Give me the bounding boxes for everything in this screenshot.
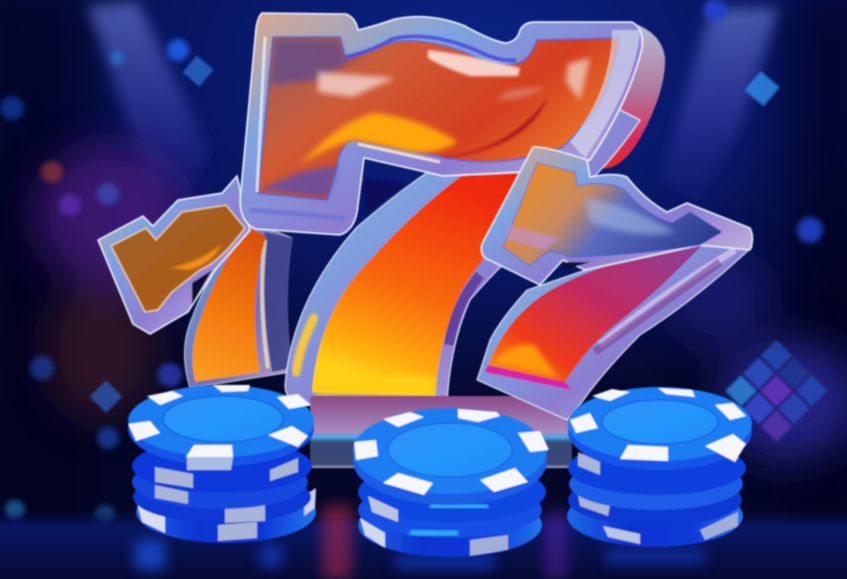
left stack lower chips [132, 439, 316, 543]
right stack lower chips [567, 441, 746, 547]
middle stack top chip [353, 408, 549, 505]
background glow [35, 145, 847, 460]
seven: left [98, 176, 293, 388]
right seven stem [477, 225, 752, 420]
left spotlight beam [88, 2, 208, 205]
right stack top chip [568, 387, 752, 470]
left seven head [98, 176, 250, 334]
seven: right [477, 147, 752, 420]
left stack top chip [128, 385, 314, 470]
right spotlight beam [660, 8, 778, 205]
glass base [310, 396, 572, 468]
big seven head [240, 13, 642, 235]
middle stack lower chips [358, 462, 546, 557]
left seven stem [184, 215, 293, 388]
chip stack: middle [353, 408, 549, 557]
big seven extrusion [570, 22, 665, 169]
chip stack: left [128, 385, 316, 543]
chip reflections on floor [135, 540, 705, 570]
seven: big centre [240, 13, 665, 405]
chip stack: right [567, 387, 752, 547]
right seven head [481, 147, 752, 285]
floor [0, 505, 847, 579]
big seven stem [285, 97, 640, 405]
window behind big seven [363, 178, 408, 214]
